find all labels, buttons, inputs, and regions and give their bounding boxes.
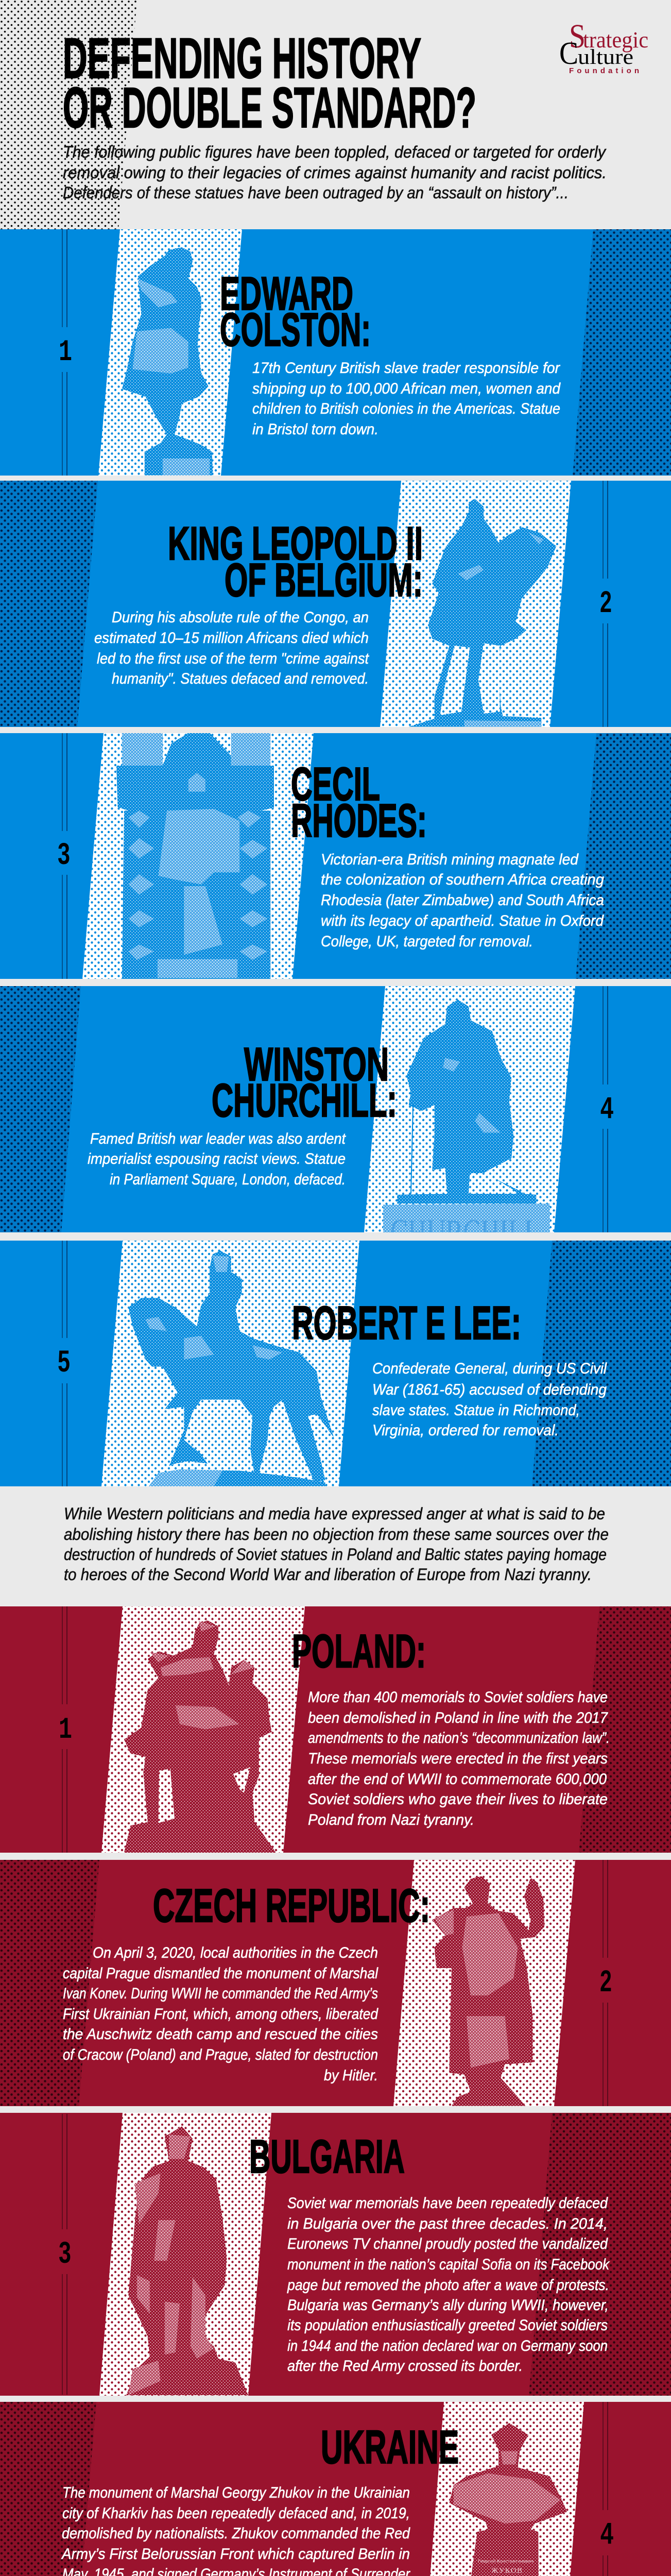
pedestal inscription: CHURCHILL	[390, 1212, 540, 1253]
body text: During his absolute rule of the Congo, an	[112, 609, 369, 626]
intro text: Defenders of these statues have been outraged by an “assault on history”...	[63, 183, 569, 202]
heading: OF BELGIUM:	[225, 554, 423, 606]
title: DEFENDING HISTORY	[63, 27, 421, 90]
body text: Soviet soldiers who gave their lives to liberate	[308, 1791, 608, 1808]
logo: C	[559, 36, 578, 71]
heading	[291, 758, 427, 847]
statue: Churchill	[383, 999, 550, 1232]
transition text: While Western politicians and media have expressed anger at what is said to be	[64, 1504, 605, 1523]
body text: the colonization of southern Africa creating	[321, 871, 604, 888]
heading: EDWARD	[220, 268, 353, 320]
body text	[94, 609, 369, 687]
body text	[372, 1360, 607, 1439]
panel: King Leopold II	[0, 481, 671, 727]
body text: its population enthusiastically greeted Soviet soldiers	[287, 2317, 608, 2334]
intro text: The following public figures have been toppled, defaced or targeted for orderly	[63, 143, 607, 161]
transition text: to heroes of the Second World War and liberation of Europe from Nazi tyranny.	[64, 1565, 592, 1584]
body text: Ivan Konev. During WWII he commanded the Red Army’s	[63, 1985, 378, 2002]
body text: Famed British war leader was also ardent	[90, 1130, 346, 1147]
heading: RHODES:	[291, 795, 427, 847]
panel: Ukraine	[0, 2402, 671, 2576]
body text: with its legacy of apartheid. Statue in Oxford	[321, 912, 604, 929]
panel: Bulgaria	[0, 2113, 671, 2396]
statue: Konev	[432, 1876, 544, 2106]
heading	[220, 268, 371, 356]
logo: Foundation	[569, 66, 639, 75]
transition text	[64, 1504, 609, 1584]
body text: Victorian-era British mining magnate led	[321, 851, 579, 868]
body text: shipping up to 100,000 African men, women and	[252, 380, 561, 397]
body text: the Auschwitz death camp and rescued the cities	[63, 2026, 378, 2043]
body text: Virginia, ordered for removal.	[372, 1422, 559, 1439]
heading: CZECH REPUBLIC:	[153, 1880, 430, 1932]
logo: ulture	[578, 45, 633, 69]
body text: More than 400 memorials to Soviet soldiers have	[308, 1689, 608, 1706]
number 2: 2	[600, 585, 612, 619]
body text: after the Red Army crossed its border.	[287, 2358, 523, 2375]
title	[63, 27, 476, 140]
body text	[61, 2484, 411, 2576]
body text: slave states. Statue in Richmond,	[372, 1402, 580, 1419]
body text: demolished by nationalists. Zhukov commanded the Red	[62, 2525, 410, 2542]
heading: CHURCHILL:	[212, 1075, 397, 1127]
body text: amendments to the nation’s “decommunization law”.	[308, 1730, 610, 1747]
body text: imperialist espousing racist views. Statue	[88, 1150, 346, 1167]
body text: city of Kharkiv has been repeatedly defaced and, in 2019,	[62, 2505, 410, 2522]
heading: CECIL	[291, 758, 380, 810]
statue: Poland memorial	[124, 1620, 276, 1853]
body text: monument in the nation’s capital Sofia on its Facebook	[287, 2256, 610, 2273]
statue: Zhukov bust	[449, 2423, 567, 2576]
body text: estimated 10–15 million Africans died which	[94, 630, 369, 647]
statue: Rhodes	[116, 733, 274, 979]
body text: capital Prague dismantled the monument of Marshal	[63, 1965, 378, 1982]
statue: Colston	[122, 247, 213, 476]
intro text	[63, 143, 607, 202]
logo: trategic	[583, 27, 648, 53]
body text	[252, 360, 561, 438]
panel: Poland	[0, 1606, 671, 1853]
body text: Soviet war memorials have been repeatedly defaced	[287, 2195, 608, 2212]
body text: humanity". Statues defaced and removed.	[112, 670, 369, 687]
heading: WINSTON	[244, 1039, 389, 1091]
body text: in Bristol torn down.	[252, 421, 378, 438]
body text: page but removed the photo after a wave of protests.	[287, 2277, 609, 2294]
body text	[321, 851, 604, 950]
halftone strip	[0, 0, 137, 229]
body text: Army’s First Belorussian Front which captured Berlin in	[61, 2546, 410, 2563]
statue: Leopold	[409, 499, 556, 727]
body text: 17th Century British slave trader responsible for	[252, 360, 560, 377]
body text: in Bulgaria over the past three decades. In 2014,	[287, 2215, 608, 2232]
body text: Rhodesia (later Zimbabwe) and South Africa	[321, 892, 604, 909]
heading: COLSTON:	[220, 304, 371, 356]
body text	[308, 1689, 610, 1828]
body text: On April 3, 2020, local authorities in the Czech	[93, 1944, 378, 1961]
intro text: removal owing to their legacies of crimes against humanity and racist politics.	[63, 163, 607, 182]
heading: BULGARIA	[249, 2131, 405, 2183]
body text: Bulgaria was Germany’s ally during WWII, however,	[287, 2297, 609, 2314]
pedestal inscription: Георгий Константинович	[478, 2559, 534, 2564]
body text	[88, 1130, 346, 1188]
number 4: 4	[600, 1091, 613, 1125]
heading: ROBERT E LEE:	[292, 1297, 521, 1349]
statue: Soviet soldier	[126, 2126, 248, 2396]
panel: Cecil Rhodes	[0, 733, 671, 979]
number 2: 2	[600, 1964, 612, 1998]
logo: S	[569, 18, 586, 55]
panel: header	[0, 0, 648, 229]
body text: in Parliament Square, London, defaced.	[110, 1171, 346, 1188]
heading	[212, 1039, 397, 1127]
panel: Winston Churchill	[0, 986, 671, 1253]
panel: Czech Republic	[0, 1860, 671, 2106]
body text: The monument of Marshal Georgy Zhukov in the Ukrainian	[62, 2484, 410, 2501]
body text: by Hitler.	[324, 2067, 378, 2084]
number 3: 3	[58, 837, 70, 871]
body text	[287, 2195, 610, 2375]
transition text: destruction of hundreds of Soviet statues in Poland and Baltic states paying homage	[64, 1545, 607, 1564]
body text: of Cracow (Poland) and Prague, slated for destruction	[63, 2046, 378, 2063]
body text: Euronews TV channel proudly posted the vandalized	[287, 2235, 608, 2252]
heading: POLAND:	[292, 1625, 426, 1677]
pedestal inscription	[478, 2559, 534, 2576]
pedestal inscription: ЖУКОВ	[491, 2567, 522, 2575]
number 1: 1	[59, 336, 72, 369]
body text: Poland from Nazi tyranny.	[308, 1811, 474, 1828]
body text: War (1861-65) accused of defending	[372, 1381, 607, 1398]
number 4: 4	[600, 2517, 613, 2550]
logo	[559, 18, 648, 75]
number 1: 1	[59, 1714, 72, 1747]
heading: KING LEOPOLD II	[168, 518, 423, 570]
body text: Confederate General, during US Civil	[372, 1360, 607, 1377]
body text: been demolished in Poland in line with the 2017	[308, 1709, 608, 1726]
heading: UKRAINE	[321, 2421, 459, 2473]
statue: Lee	[127, 1250, 334, 1486]
panel: Edward Colston	[0, 229, 671, 476]
panel: Robert E Lee	[0, 1241, 671, 1486]
transition text: abolishing history there has been no objection from these same sources over the	[64, 1525, 609, 1544]
body text: First Ukrainian Front, which, among others, liberated	[63, 2006, 378, 2023]
body text: College, UK, targeted for removal.	[321, 933, 533, 950]
body text: in 1944 and the nation declared war on Germany soon	[287, 2337, 608, 2354]
body text: children to British colonies in the Americas. Statue	[252, 400, 560, 417]
body text: led to the first use of the term "crime against	[97, 650, 369, 667]
body text	[63, 1944, 378, 2084]
number 5: 5	[58, 1345, 70, 1378]
body text: These memorials were erected in the first years	[308, 1750, 608, 1767]
body text: after the end of WWII to commemorate 600,000	[308, 1771, 607, 1788]
heading	[168, 518, 423, 606]
number 3: 3	[59, 2236, 71, 2269]
